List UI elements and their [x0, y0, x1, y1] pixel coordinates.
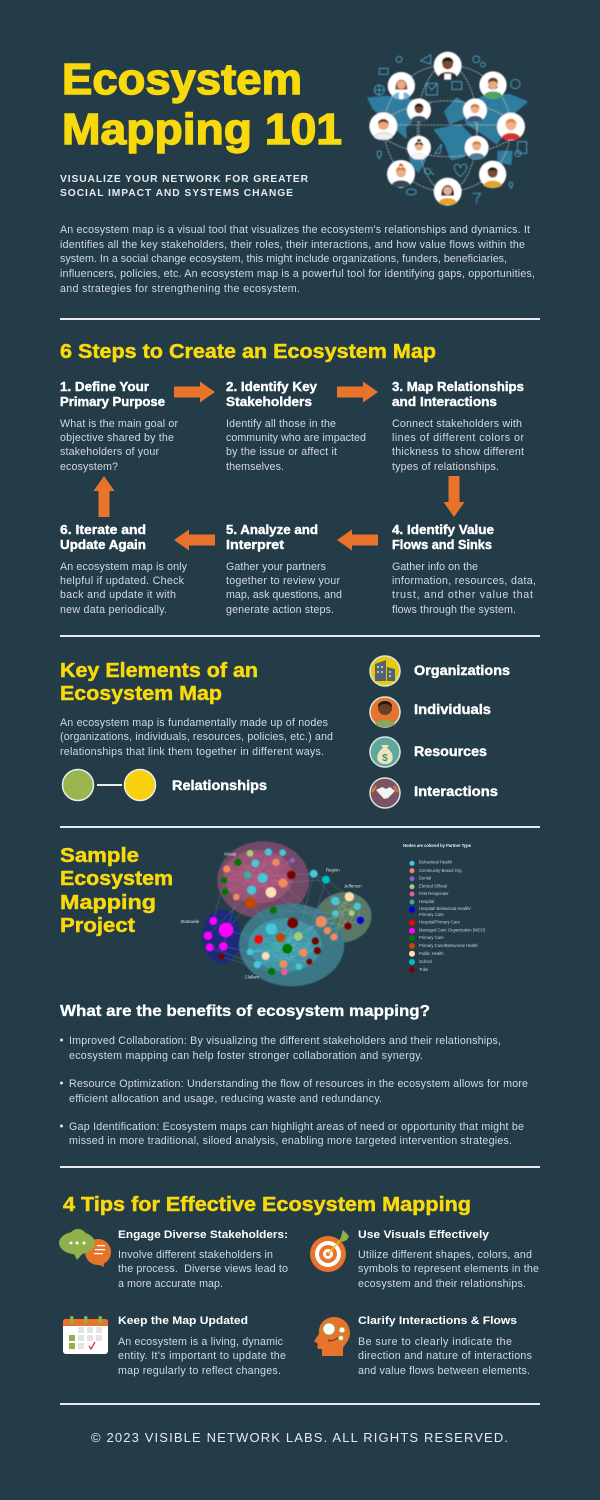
- text: key elements description: [60, 717, 333, 758]
- text: key elements description: relationships that link them together in different ways.: [60, 746, 324, 758]
- legend: partner types: Hospital/ Behavioral Health/: [419, 906, 472, 911]
- panel: step 3: [392, 379, 524, 473]
- network links: [208, 852, 360, 972]
- panel: step 6: [60, 522, 188, 616]
- legend: partner types: Behavioral Health: [419, 860, 453, 864]
- panel: step 5: generate action steps.: [226, 604, 334, 616]
- text: tip clarify interactions: [358, 1315, 532, 1377]
- panel: step 5: map, ask questions, and: [226, 589, 342, 601]
- text: tip keep updated: [118, 1315, 286, 1377]
- legend: partner types: Primary Care: [419, 912, 444, 917]
- list: benefits: ecosystem mapping can help foster stronger collaboration and synergy.: [69, 1050, 423, 1062]
- heading: six steps: 6 Steps to Create an Ecosystem Map: [60, 340, 436, 363]
- legend: partner types: Tribe: [419, 967, 429, 972]
- text: key elements description: (organizations, individuals, resources, policies, etc.) and: [60, 731, 333, 743]
- panel: step 2: by the issue or affect it: [226, 446, 337, 458]
- text: tip engage stakeholders: [118, 1229, 288, 1290]
- text: tip clarify interactions: Be sure to clearly indicate the: [358, 1336, 512, 1348]
- panel: step 4: Flows and Sinks: [392, 537, 492, 552]
- legend: partner types: Hospital: [419, 899, 434, 904]
- nodes: [204, 848, 364, 975]
- cluster labels: Clallam: [245, 975, 259, 980]
- legend: partner types: Managed Care Organization (MCO): [419, 928, 486, 932]
- subtitle: VISUALIZE YOUR NETWORK FOR GREATER: [60, 174, 309, 185]
- label: resources: Resources: [414, 744, 487, 759]
- list: benefits: Improved Collaboration: By visualizing the different stakeholders and their relationships,: [69, 1035, 501, 1047]
- diagram: relationships: Relationships: [172, 778, 267, 793]
- icon: resources: $: [382, 753, 388, 764]
- panel: step 2: 2. Identify Key: [226, 379, 318, 394]
- intro paragraph: An ecosystem map is a visual tool that visualizes the ecosystem's relationships and dynamics. It: [60, 224, 530, 236]
- arrow: step 6 to 1: [94, 476, 114, 517]
- panel: step 6: new data periodically.: [60, 604, 167, 616]
- icon: head with gears: [314, 1317, 350, 1356]
- panel: step 1: ecosystem?: [60, 461, 118, 473]
- legend: partner types: Hospital/Primary Care: [419, 920, 461, 924]
- icons: small line icons: [374, 55, 527, 203]
- text: tip engage stakeholders: Involve different stakeholders in: [118, 1249, 273, 1261]
- text: tip use visuals: Use Visuals Effectively: [358, 1229, 490, 1241]
- arrow: step 3 to 4: [444, 476, 464, 517]
- cluster regions: [202, 841, 376, 986]
- text: tip keep updated: entity. It's important to update the: [118, 1350, 286, 1362]
- panel: step 1: objective shared by the: [60, 432, 174, 444]
- intro paragraph: system. In a social change ecosystem, this might include organizations, funders, beneficiaries,: [60, 253, 507, 265]
- icon: resources: [370, 737, 400, 767]
- intro paragraph: influencers, policies, etc. An ecosystem map is a powerful tool for identifying gaps, opportunities,: [60, 268, 535, 280]
- text: tip use visuals: [358, 1229, 539, 1290]
- panel: step 3: types of relationships.: [392, 461, 499, 473]
- panel: step 6: 6. Iterate and: [60, 522, 146, 537]
- panel: step 1: stakeholders of your: [60, 446, 159, 458]
- cluster labels: Region: [326, 867, 340, 872]
- legend: partner types: Elected Official: [419, 884, 447, 888]
- legend: partner types: [403, 843, 486, 973]
- chart: network map: [180, 841, 376, 986]
- panel: step 2: Stakeholders: [226, 394, 312, 409]
- title: Ecosystem: [62, 55, 302, 104]
- title: [62, 55, 342, 154]
- panel: step 4: flows through the system.: [392, 604, 516, 616]
- heading: sample project: Ecosystem: [60, 867, 173, 890]
- legend: partner types: Public Health: [419, 951, 444, 956]
- list: benefits: Gap Identification: Ecosystem maps can highlight areas of need or opportunity that might be: [69, 1121, 524, 1133]
- illustration: global stakeholder network: [368, 52, 527, 206]
- panel: step 4: Gather info on the: [392, 561, 478, 573]
- heading: sample project: [60, 844, 173, 937]
- cluster labels: Jefferson: [344, 883, 362, 888]
- label: individuals: Individuals: [414, 702, 491, 717]
- heading: key elements: Ecosystem Map: [60, 682, 222, 705]
- heading: sample project: Mapping: [60, 891, 156, 914]
- label: interactions: Interactions: [414, 784, 498, 799]
- heading: sample project: Sample: [60, 844, 139, 867]
- panel: step 3: 3. Map Relationships: [392, 379, 524, 394]
- panel: step 5: Gather your partners: [226, 561, 326, 573]
- panel: step 3: thickness to show different: [392, 446, 524, 458]
- legend: partner types: Community-Based Org: [419, 868, 462, 873]
- icon: world map: [368, 95, 527, 172]
- panel: step 1: Primary Purpose: [60, 394, 165, 409]
- panel: step 5: Interpret: [226, 537, 285, 552]
- text: tip keep updated: map regularly to reflect changes.: [118, 1365, 281, 1377]
- text: tip keep updated: Keep the Map Updated: [118, 1315, 248, 1327]
- text: tip use visuals: Utilize different shapes, colors, and: [358, 1249, 532, 1261]
- panel: step 4: 4. Identify Value: [392, 522, 494, 537]
- heading: sample project: Project: [60, 914, 135, 937]
- panel: step 4: [392, 522, 536, 616]
- title: Mapping 101: [62, 105, 342, 154]
- panel: step 2: community who are impacted: [226, 432, 366, 444]
- list: benefits: Resource Optimization: Understanding the flow of resources in the ecosystem allows for more: [69, 1078, 528, 1090]
- cluster labels: Kitsap: [224, 852, 237, 857]
- arrow: step 2 to 3: [337, 382, 378, 402]
- cluster labels: [180, 852, 362, 980]
- panel: step 3: and Interactions: [392, 394, 497, 409]
- intro paragraph: and strategies for strengthening the ecosystem.: [60, 283, 300, 295]
- panel: step 3: Connect stakeholders with: [392, 418, 522, 430]
- icon: individuals: [370, 697, 400, 727]
- panel: step 1: 1. Define Your: [60, 379, 149, 394]
- subtitle: [60, 174, 309, 199]
- panel: step 1: What is the main goal or: [60, 418, 178, 430]
- panel: step 2: themselves.: [226, 461, 284, 473]
- panel: step 6: An ecosystem map is only: [60, 561, 188, 573]
- legend: partner types: Nodes are colored by Partner Type: [403, 843, 472, 848]
- panel: step 5: [226, 522, 342, 616]
- panel: step 6: Update Again: [60, 537, 146, 552]
- text: tip keep updated: An ecosystem is a living, dynamic: [118, 1336, 284, 1348]
- arrow: step 4 to 5: [337, 530, 378, 550]
- cluster labels: Statewide: [180, 919, 200, 924]
- heading: four tips: 4 Tips for Effective Ecosystem Mapping: [63, 1193, 471, 1216]
- icon: organizations: [370, 656, 400, 686]
- diagram: relationships: [62, 770, 267, 800]
- text: tip engage stakeholders: a more accurate map.: [118, 1278, 223, 1290]
- panel: step 2: Identify all those in the: [226, 418, 336, 430]
- text: tip use visuals: symbols to represent elements in the: [358, 1263, 539, 1275]
- list: benefits: [60, 1035, 528, 1147]
- panel: step 2: [226, 379, 366, 473]
- portraits: [369, 52, 525, 206]
- subtitle: SOCIAL IMPACT AND SYSTEMS CHANGE: [60, 188, 293, 199]
- panel: step 5: together to review your: [226, 575, 340, 587]
- legend: partner types: School: [419, 959, 432, 964]
- panel: step 6: helpful if updated. Check: [60, 575, 185, 587]
- panel: step 5: 5. Analyze and: [226, 522, 318, 537]
- legend: partner types: Primary Care: [419, 935, 444, 940]
- arrow: step 1 to 2: [174, 382, 215, 402]
- label: organizations: Organizations: [414, 663, 510, 678]
- heading: benefits: What are the benefits of ecosystem mapping?: [60, 1003, 430, 1020]
- icon: interactions: [370, 778, 400, 808]
- text: tip clarify interactions: and value flows between elements.: [358, 1365, 530, 1377]
- text: tip use visuals: ecosystem and their relationships.: [358, 1278, 526, 1290]
- intro paragraph: identifies all the key stakeholders, their roles, their interactions, and how value flows within the: [60, 239, 525, 251]
- heading: key elements: [60, 659, 258, 705]
- text: key elements description: An ecosystem map is fundamentally made up of nodes: [60, 717, 328, 729]
- panel: step 1: [60, 379, 178, 473]
- legend: partner types: Primary Care/Behavioral Health: [419, 943, 479, 948]
- arrow: step 5 to 6: [174, 530, 215, 550]
- panel: step 3: lines of different colors or: [392, 432, 524, 444]
- icon: target: [310, 1230, 349, 1272]
- text: tip clarify interactions: Clarify Interactions & Flows: [358, 1315, 517, 1327]
- heading: key elements: Key Elements of an: [60, 659, 258, 682]
- list: benefits: efficient allocation and usage, reducing waste and redundancy.: [69, 1093, 382, 1105]
- intro paragraph: [60, 224, 535, 295]
- icon: speech bubbles: [59, 1229, 111, 1267]
- text: tip engage stakeholders: Engage Diverse Stakeholders:: [118, 1229, 288, 1241]
- text: tip clarify interactions: direction and nature of interactions: [358, 1350, 532, 1362]
- panel: step 4: information, resources, data,: [392, 575, 536, 587]
- list: benefits: missed in more traditional, siloed analysis, enabling more targeted intervention strategies.: [69, 1135, 512, 1147]
- legend: partner types: Dental: [419, 876, 431, 880]
- panel: step 6: back and update it with: [60, 589, 176, 601]
- text: tip engage stakeholders: the process. Diverse views lead to: [118, 1263, 288, 1275]
- network links: [383, 65, 511, 192]
- panel: step 4: trust, and other value that: [392, 589, 533, 601]
- icon: calendar: [63, 1316, 108, 1354]
- legend: partner types: First Responder: [419, 891, 449, 896]
- footer: © 2023 VISIBLE NETWORK LABS. ALL RIGHTS RESERVED.: [91, 1430, 508, 1445]
